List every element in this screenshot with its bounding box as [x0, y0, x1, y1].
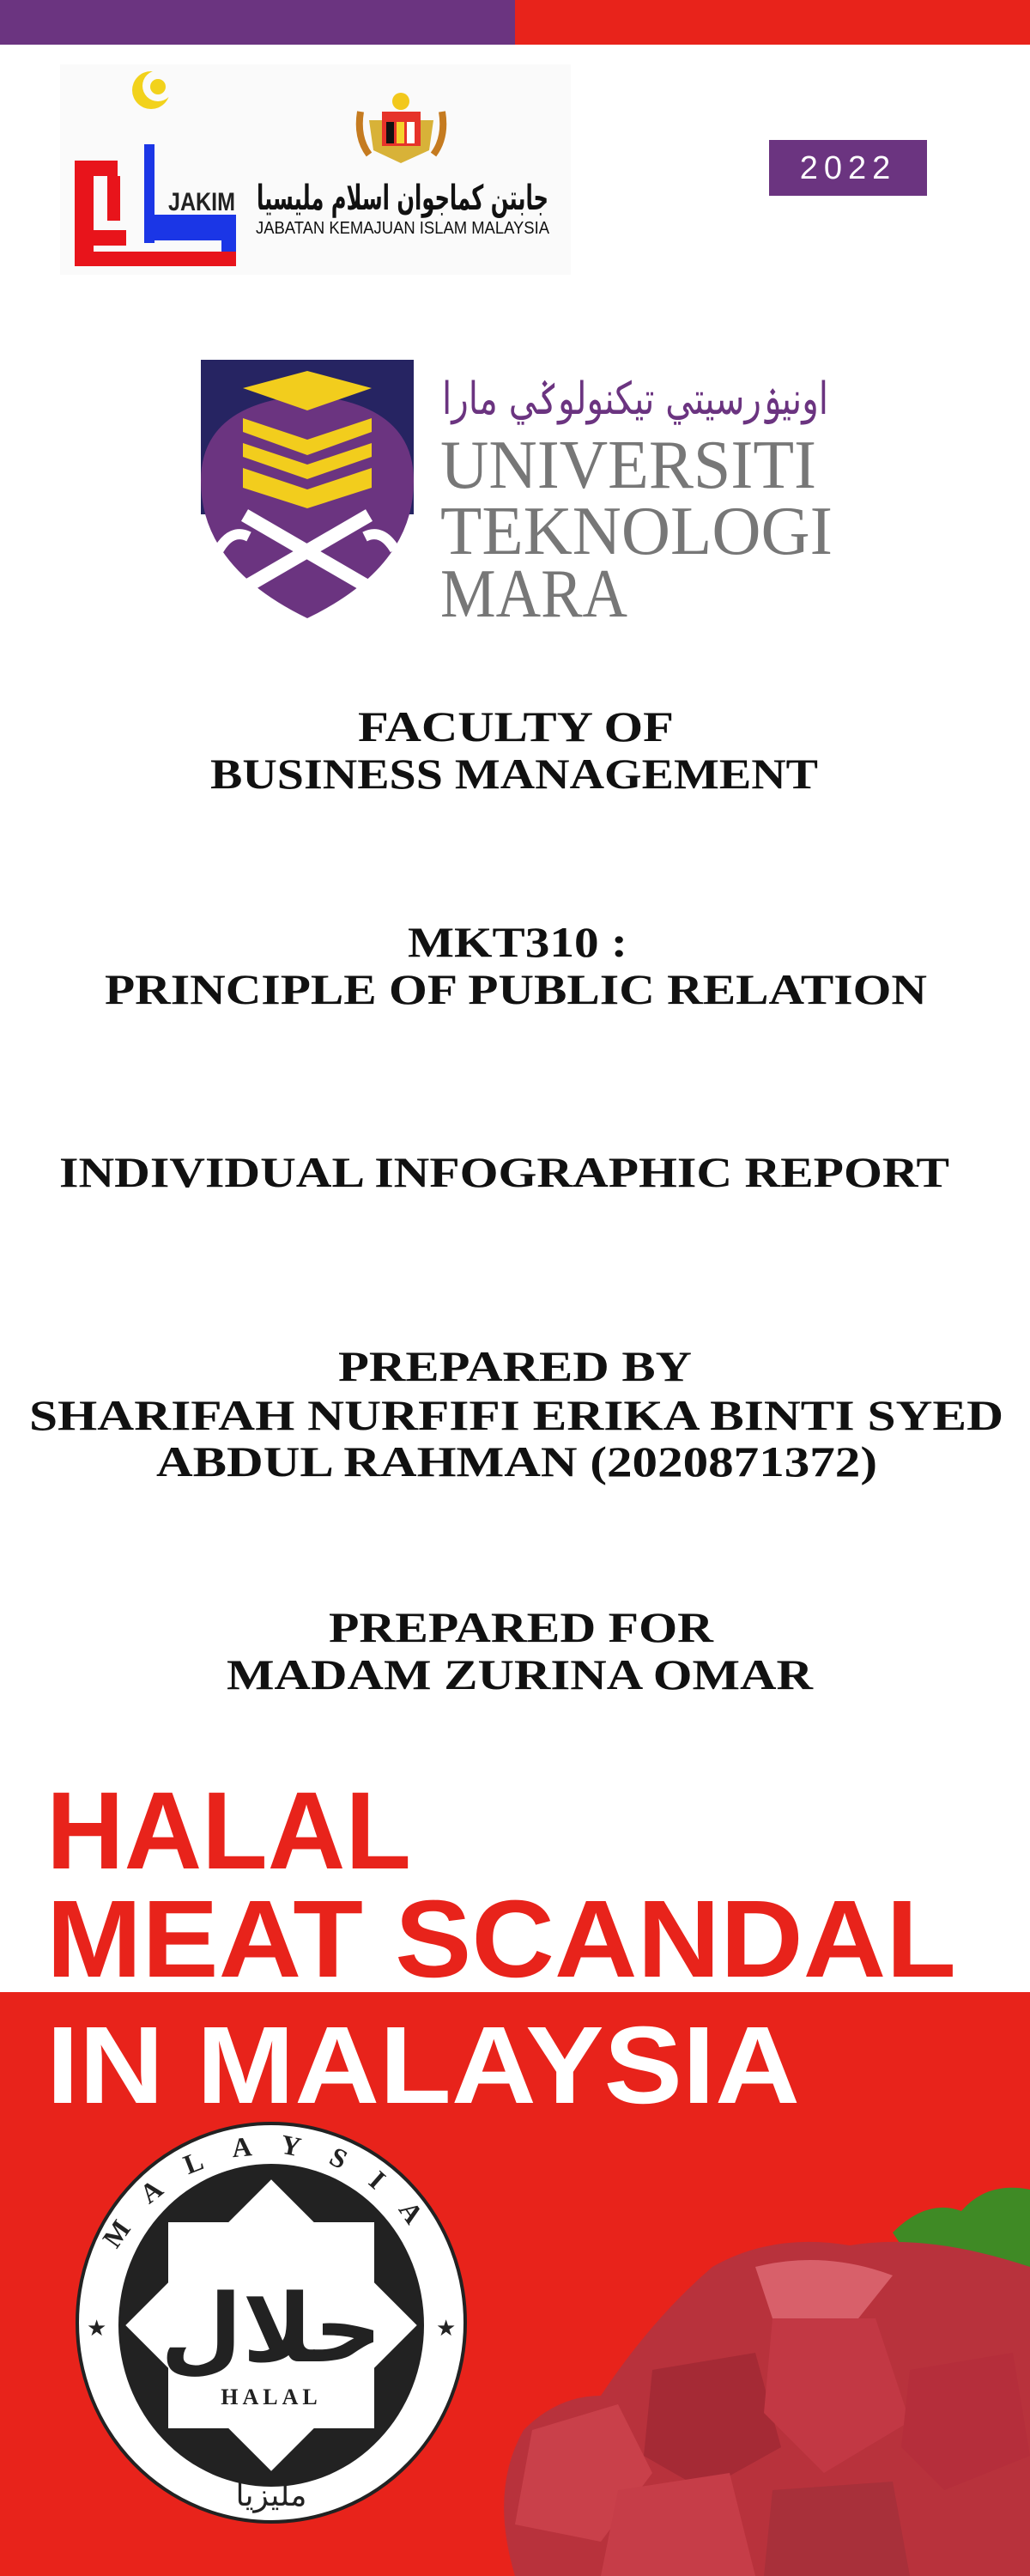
title: HALAL: [46, 1770, 411, 1893]
icon: crest: [360, 93, 443, 163]
text: UNIVERSITI TEKNOLOGI MARA: UNIVERSITI: [440, 428, 816, 503]
image: raw meat cubes: [504, 2188, 1030, 2576]
text: prepared for: [227, 1603, 814, 1698]
text: Jawi name: جابتن كماجوان اسلام مليسيا: [257, 179, 548, 218]
year badge: 2022: [800, 150, 896, 186]
icon: halal logo: ★: [87, 2315, 106, 2341]
logo: UiTM: [201, 360, 833, 632]
text: prepared by: ABDUL RAHMAN (2020871372): [156, 1437, 877, 1485]
text: report type: INDIVIDUAL INFOGRAPHIC REPORT: [59, 1148, 949, 1196]
logo: JAKIM: [60, 64, 571, 275]
icon: halal logo: مليزيا: [236, 2478, 306, 2513]
text: prepared by: [29, 1342, 1003, 1485]
text: JABATAN KEMAJUAN ISLAM MALAYSIA: JABATAN KEMAJUAN ISLAM MALAYSIA: [256, 219, 550, 238]
icon: halal logo: [76, 2122, 467, 2524]
text: course: MKT310 :: [408, 918, 627, 966]
text: faculty: FACULTY OF: [358, 702, 674, 750]
icon: halal logo: ★: [436, 2315, 456, 2341]
text: UNIVERSITI TEKNOLOGI MARA: MARA: [440, 556, 627, 632]
text: prepared for: MADAM ZURINA OMAR: [227, 1650, 814, 1698]
text: faculty: [210, 702, 818, 798]
text: course: [105, 918, 927, 1013]
icon: halal logo: MALAYSIA: [102, 2135, 420, 2250]
text: UNIVERSITI TEKNOLOGI MARA: TEKNOLOGI: [440, 494, 833, 569]
icon: JAKIM kufic mark: [75, 70, 236, 266]
text: prepared for: PREPARED FOR: [329, 1603, 714, 1651]
text: UNIVERSITI TEKNOLOGI MARA: [440, 428, 833, 632]
text: JAKIM: JAKIM: [168, 188, 235, 216]
red bottom panel: [0, 1992, 1030, 2576]
year badge: [769, 140, 927, 196]
text: course: PRINCIPLE OF PUBLIC RELATION: [105, 965, 927, 1013]
title: MEAT SCANDAL: [46, 1878, 956, 2001]
icon: halal logo: HALAL: [221, 2385, 322, 2409]
title: [46, 1770, 956, 2127]
text: faculty: BUSINESS MANAGEMENT: [210, 750, 818, 798]
text: prepared by: SHARIFAH NURFIFI ERIKA BINTI SYED: [29, 1391, 1003, 1439]
top bar: [0, 0, 1030, 45]
icon: UiTM shield: [201, 360, 414, 618]
text: Jawi university name: اونيۏرسيتي تيكنولوݢي مارا: [442, 374, 828, 425]
icon: halal logo: حلال: [161, 2274, 382, 2384]
text: prepared by: PREPARED BY: [338, 1342, 692, 1390]
title: IN MALAYSIA: [46, 2004, 800, 2127]
